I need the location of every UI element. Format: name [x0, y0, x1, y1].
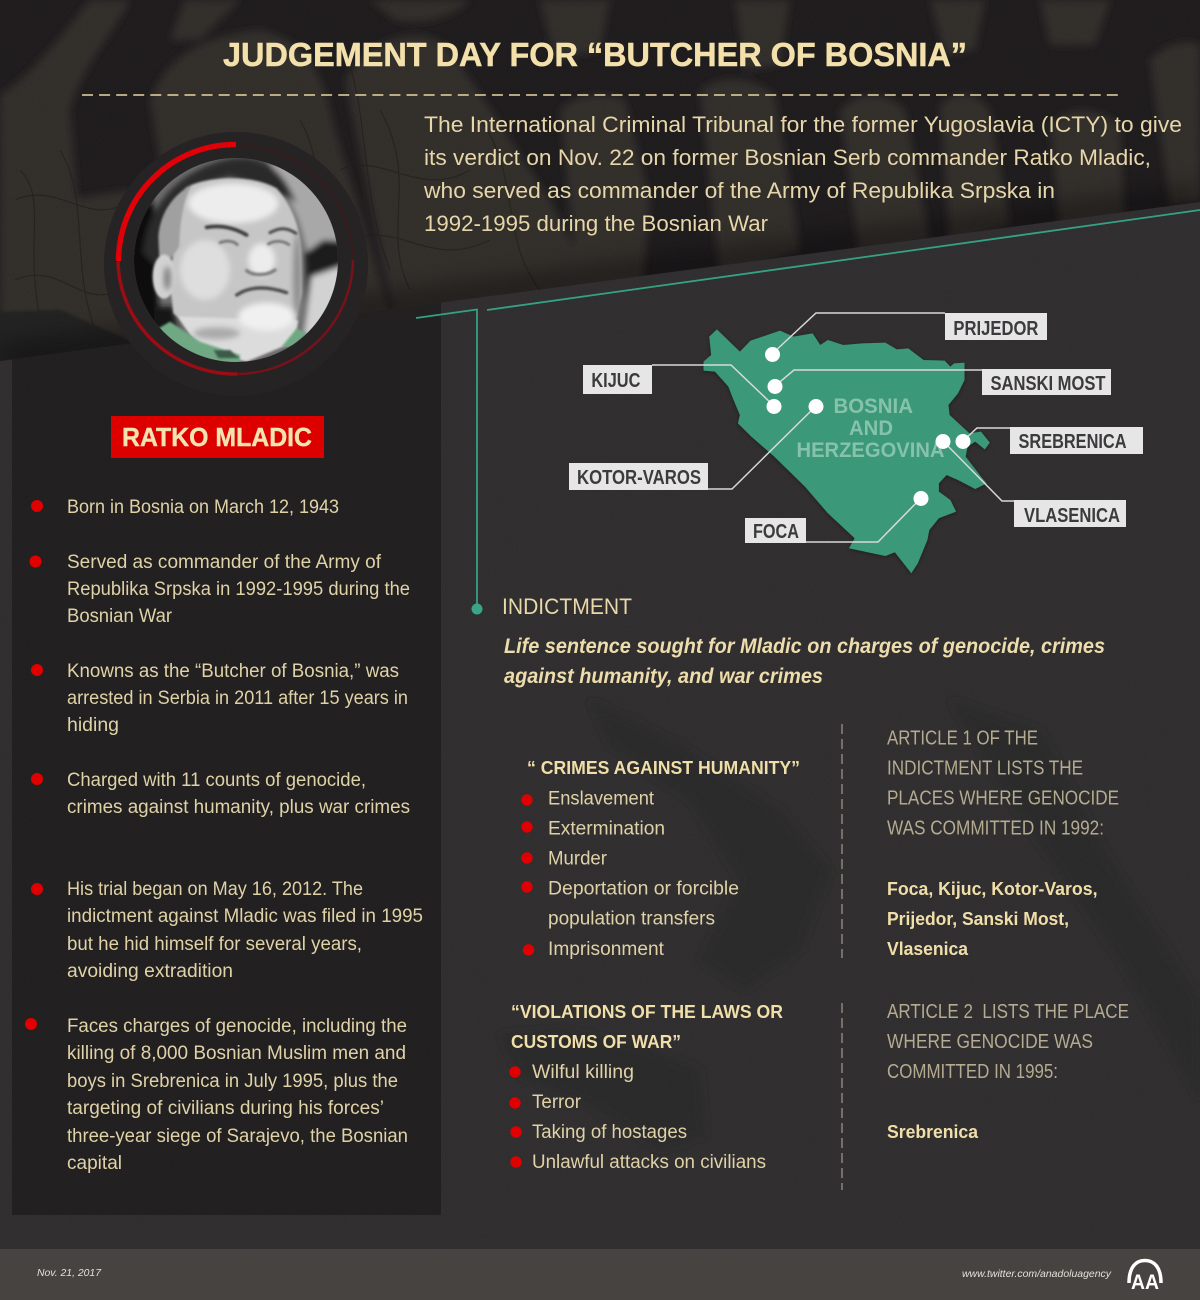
panel: left biography background	[12, 290, 441, 1215]
map location dots	[765, 347, 970, 506]
violations list	[532, 1062, 766, 1173]
intro text: 1992-1995 during the Bosnian War	[424, 211, 768, 236]
indictment heading: INDICTMENT	[502, 594, 632, 619]
article 1 places: Prijedor, Sanski Most,	[887, 908, 1069, 929]
map location labels	[569, 313, 1143, 543]
crimes against humanity list: Imprisonment	[548, 939, 665, 960]
violations list: Terror	[532, 1092, 582, 1113]
icon: Anadolu Agency logo: AA	[1131, 1271, 1159, 1294]
indictment summary: Life sentence sought for Mladic on charges of genocide, crimes	[504, 635, 1105, 658]
article 2 place: Srebrenica	[887, 1121, 979, 1142]
article 2 text: ARTICLE 2 LISTS THE PLACE	[887, 1001, 1129, 1023]
map country name: HERZEGOVINA	[796, 439, 944, 462]
biography text: Republika Srpska in 1992-1995 during the	[67, 579, 410, 600]
biography text: boys in Srebrenica in July 1995, plus the	[67, 1071, 398, 1092]
map country name: BOSNIA	[834, 395, 913, 418]
biography text: Faces charges of genocide, including the	[67, 1016, 407, 1037]
intro text	[423, 112, 1182, 236]
biography text: hiding	[67, 715, 119, 736]
ring arcs	[118, 144, 353, 374]
biography text: His trial began on May 16, 2012. The	[67, 879, 363, 900]
biography text: capital	[67, 1153, 122, 1174]
article 1 text	[887, 728, 1119, 840]
biography text: Bosnian War	[67, 606, 173, 627]
violations bullets	[509, 1066, 522, 1168]
biography text	[67, 497, 423, 1174]
biography text: arrested in Serbia in 2011 after 15 years in	[67, 688, 408, 709]
map location labels: VLASENICA	[1024, 505, 1120, 527]
crimes against humanity list: Extermination	[548, 818, 665, 840]
indictment summary: against humanity, and war crimes	[504, 665, 823, 688]
crimes against humanity list: Enslavement	[548, 788, 655, 810]
biography text: three-year siege of Sarajevo, the Bosnian	[67, 1126, 408, 1147]
article 1 text: PLACES WHERE GENOCIDE	[887, 788, 1119, 810]
title: JUDGEMENT DAY FOR “BUTCHER OF BOSNIA”	[223, 37, 967, 74]
footer date: Nov. 21, 2017	[37, 1267, 102, 1279]
crimes against humanity heading: “ CRIMES AGAINST HUMANITY”	[527, 757, 800, 778]
biography text: but he hid himself for several years,	[67, 934, 362, 955]
article 1 places	[887, 878, 1098, 959]
map leader lines	[652, 313, 1014, 542]
map location labels: FOCA	[753, 521, 799, 543]
indictment summary	[504, 635, 1105, 688]
footer url: www.twitter.com/anadoluagency	[962, 1268, 1112, 1280]
crimes against humanity bullets	[521, 794, 534, 956]
intro text: The International Criminal Tribunal for the former Yugoslavia (ICTY) to give	[424, 112, 1182, 137]
violations heading: CUSTOMS OF WAR”	[511, 1031, 681, 1052]
article 2 text	[887, 1001, 1129, 1083]
article 1 text: WAS COMMITTED IN 1992:	[887, 818, 1104, 840]
teal timeline connector	[416, 210, 1200, 614]
name plate: Ratko Mladic	[111, 416, 324, 458]
name plate: Ratko Mladic: RATKO MLADIC	[122, 422, 312, 452]
violations list: Taking of hostages	[532, 1122, 687, 1143]
column dividers	[841, 724, 843, 1190]
title divider	[82, 94, 1118, 96]
crimes against humanity list: population transfers	[548, 908, 715, 930]
map country name	[796, 395, 944, 462]
map location labels: KOTOR-VAROS	[577, 467, 701, 489]
article 2 text: WHERE GENOCIDE WAS	[887, 1031, 1093, 1053]
map location labels: KIJUC	[591, 370, 640, 392]
violations list: Wilful killing	[532, 1062, 634, 1083]
violations heading: “VIOLATIONS OF THE LAWS OR	[511, 1001, 783, 1022]
icon: Anadolu Agency logo	[1129, 1260, 1161, 1294]
biography text: indictment against Mladic was filed in 1995	[67, 906, 423, 927]
biography text: Born in Bosnia on March 12, 1943	[67, 497, 339, 518]
portrait with progress ring	[104, 132, 368, 396]
intro text: who served as commander of the Army of Republika Srpska in	[423, 178, 1055, 203]
violations heading	[511, 1001, 783, 1052]
article 1 places: Vlasenica	[887, 938, 969, 959]
map location labels: SANSKI MOST	[990, 373, 1106, 395]
map location labels: SREBRENICA	[1018, 431, 1126, 453]
biography text: targeting of civilians during his forces’	[67, 1098, 384, 1119]
article 1 text: INDICTMENT LISTS THE	[887, 758, 1083, 780]
article 1 places: Foca, Kijuc, Kotor-Varos,	[887, 878, 1098, 899]
violations list: Unlawful attacks on civilians	[532, 1152, 766, 1173]
article 2 text: COMMITTED IN 1995:	[887, 1061, 1058, 1083]
map location labels: PRIJEDOR	[953, 318, 1039, 340]
biography text: avoiding extradition	[67, 961, 233, 982]
crimes against humanity list: Deportation or forcible	[548, 878, 739, 900]
map: Bosnia and Herzegovina	[569, 313, 1143, 573]
biography text: Knowns as the “Butcher of Bosnia,” was	[67, 661, 399, 682]
header background with crowd silhouettes	[0, 0, 1200, 370]
map country name: AND	[849, 417, 893, 440]
crimes against humanity list	[548, 788, 739, 960]
biography bullets	[25, 500, 43, 1030]
photo: Ratko Mladic	[134, 158, 338, 362]
biography text: crimes against humanity, plus war crimes	[67, 797, 410, 818]
biography text: Charged with 11 counts of genocide,	[67, 770, 366, 791]
crimes against humanity list: Murder	[548, 848, 608, 870]
article 1 text: ARTICLE 1 OF THE	[887, 728, 1038, 750]
biography text: Served as commander of the Army of	[67, 552, 382, 573]
footer bar	[0, 1249, 1200, 1300]
intro text: its verdict on Nov. 22 on former Bosnian Serb commander Ratko Mladic,	[424, 145, 1151, 170]
faint map texture	[500, 700, 1200, 1150]
biography text: killing of 8,000 Bosnian Muslim men and	[67, 1043, 406, 1064]
